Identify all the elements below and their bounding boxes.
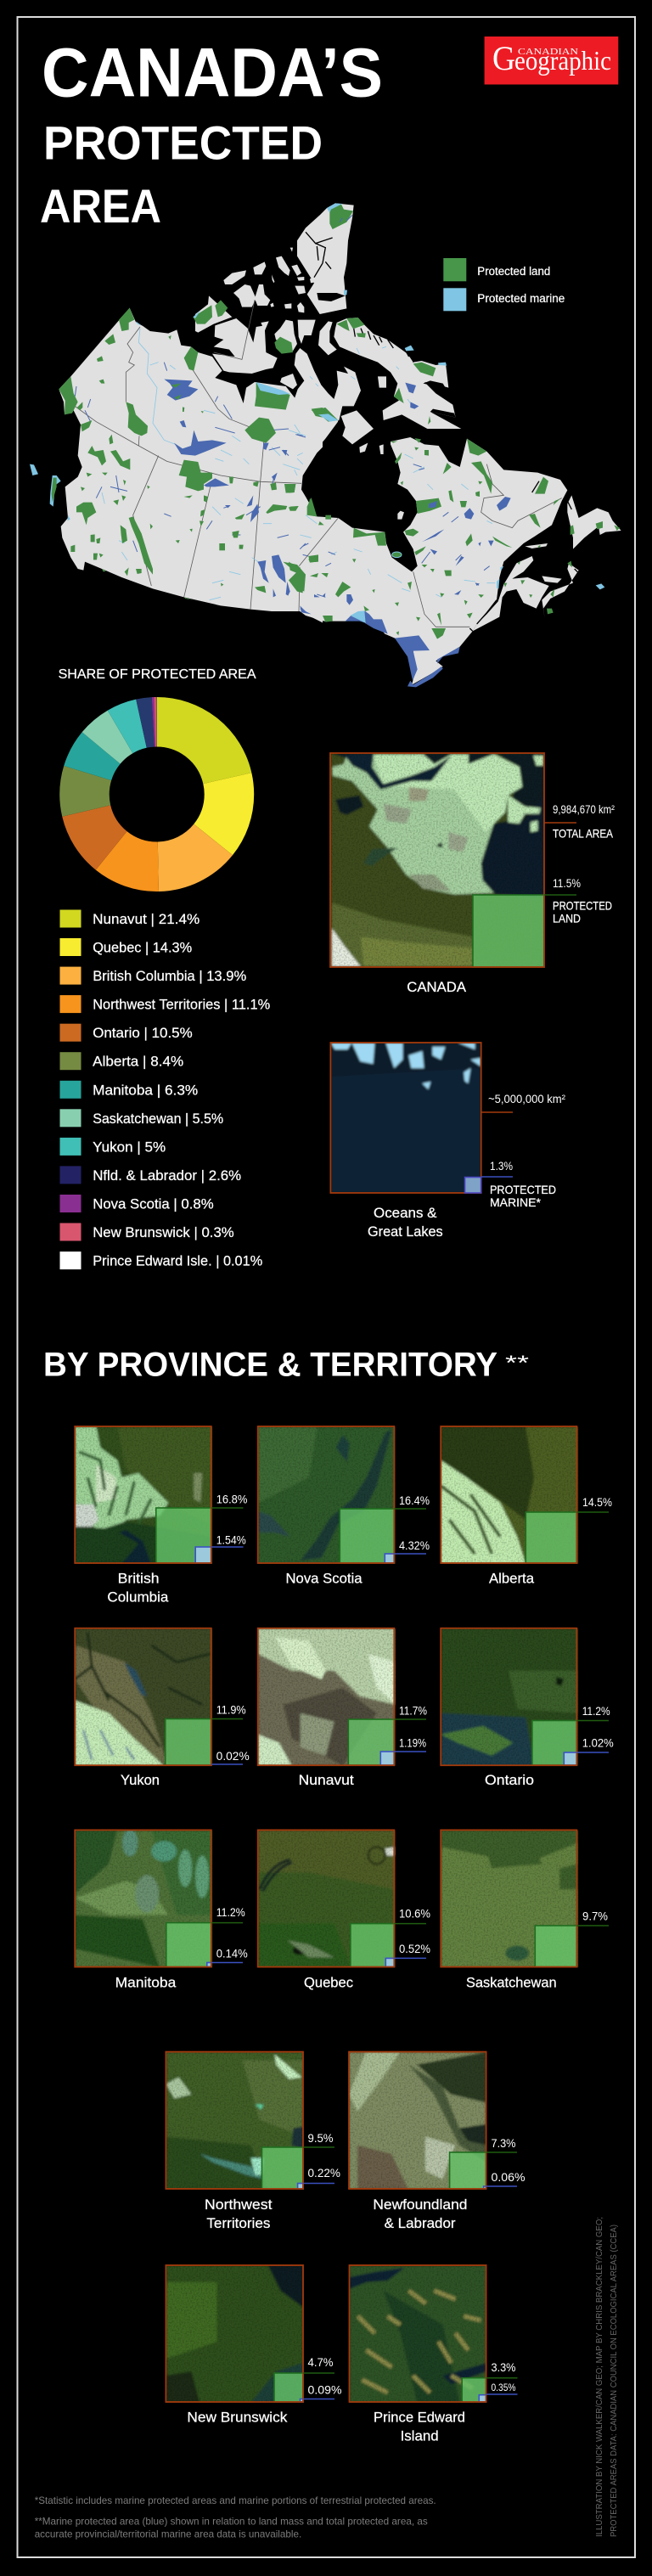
arctic islands xyxy=(195,248,361,484)
protected land areas, north xyxy=(274,203,447,464)
panel: Saskatchewan: 9.7% xyxy=(582,1910,608,1922)
heading: by province and territory: ** xyxy=(505,1352,529,1375)
panel: New Brunswick: 4.7% xyxy=(307,2356,333,2369)
panel: Ontario xyxy=(441,1628,614,1788)
caption: oceans and great lakes xyxy=(368,1205,443,1240)
label: total area: 9,984,670 km² xyxy=(553,803,615,816)
panel: Manitoba: 0.14% xyxy=(216,1947,248,1960)
panel: Ontario: Ontario xyxy=(485,1772,534,1788)
panel: Quebec: 0.52% xyxy=(399,1943,430,1955)
donut legend: Saskatchewan | 5.5% xyxy=(93,1111,223,1127)
label: protected marine: PROTECTED xyxy=(490,1183,556,1196)
panel: Newfoundland and Labrador: Newfoundland xyxy=(373,2196,467,2213)
label: protected land: LAND xyxy=(553,912,581,925)
panel: Newfoundland and Labrador: 7.3% xyxy=(491,2137,516,2150)
footnotes: **Marine protected area (blue) shown in relation to land mass and total protected area, as xyxy=(35,2515,428,2527)
panel: Northwest Territories: Territories xyxy=(206,2215,270,2231)
panel: Northwest Territories: 0.22% xyxy=(307,2167,340,2179)
panel: Nova Scotia: 16.4% xyxy=(399,1494,430,1507)
panel: British Columbia: Columbia xyxy=(107,1589,169,1605)
panel: British Columbia: 1.54% xyxy=(216,1534,246,1547)
panel: Manitoba xyxy=(75,1829,248,1991)
label: total area: TOTAL AREA xyxy=(553,827,614,841)
panel: New Brunswick xyxy=(166,2265,341,2425)
credits (rotated): PROTECTED AREAS DATA: CANADIAN COUNCIL ON ECOLOGICAL AREAS (CCEA) xyxy=(609,2224,619,2537)
donut legend: Yukon | 5% xyxy=(93,1139,166,1155)
donut legend: Nunavut | 21.4% xyxy=(93,911,200,927)
panel: Nunavut: 1.19% xyxy=(399,1737,426,1749)
map legend: Protected marine xyxy=(477,292,565,305)
title: CANADA’S xyxy=(42,34,383,112)
panel: New Brunswick: New Brunswick xyxy=(187,2410,288,2425)
label: protected marine xyxy=(481,1160,556,1209)
panel: Ontario: 11.2% xyxy=(582,1705,610,1718)
heading: share of protected area: SHARE OF PROTECTED AREA xyxy=(59,667,256,682)
panel: Newfoundland and Labrador: 0.06% xyxy=(491,2171,525,2184)
panel: Alberta: 14.5% xyxy=(582,1496,612,1509)
label: protected marine: 1.3% xyxy=(490,1160,513,1173)
panel: Northwest Territories xyxy=(166,2052,340,2231)
donut legend: Northwest Territories | 11.1% xyxy=(93,997,270,1013)
label: total area xyxy=(544,803,615,841)
panel: Quebec: 10.6% xyxy=(399,1907,430,1921)
caption: oceans and great lakes: Oceans & xyxy=(374,1205,437,1221)
protected land areas, south and east xyxy=(289,425,620,687)
donut legend: Nfld. & Labrador | 2.6% xyxy=(93,1167,241,1184)
panel: New Brunswick: 0.09% xyxy=(307,2383,341,2396)
donut legend: Nova Scotia | 0.8% xyxy=(93,1195,214,1212)
map legend: Protected land xyxy=(477,265,550,278)
panel: British Columbia: 16.8% xyxy=(216,1493,247,1506)
Hudson Bay and islands xyxy=(301,410,580,631)
donut chart xyxy=(84,722,229,867)
label: protected land: PROTECTED xyxy=(553,899,612,913)
panel: oceans and great lakes satellite xyxy=(330,1043,565,1240)
label: protected land xyxy=(544,877,612,925)
panel: Nunavut xyxy=(258,1628,427,1788)
panel: Prince Edward Island: Island xyxy=(401,2428,439,2444)
logo: Canadian Geographic xyxy=(485,37,618,85)
label: total marine: ~5,000,000 km² xyxy=(488,1093,565,1105)
panel: Northwest Territories: 9.5% xyxy=(307,2132,333,2145)
panel: Prince Edward Island: 0.35% xyxy=(491,2382,516,2393)
protected land areas, west xyxy=(30,300,323,614)
panel: Ontario: 1.02% xyxy=(582,1737,614,1749)
credits (rotated) xyxy=(594,2217,619,2537)
footnotes: *Statistic includes marine protected areas and marine portions of terrestrial protected areas. xyxy=(35,2494,436,2506)
donut legend: Ontario | 10.5% xyxy=(93,1025,193,1041)
panel: Yukon xyxy=(75,1628,250,1788)
panel: Saskatchewan: Saskatchewan xyxy=(466,1975,557,1991)
panel: Quebec xyxy=(258,1830,430,1991)
donut legend xyxy=(59,910,270,1269)
panel: Newfoundland and Labrador: & Labrador xyxy=(385,2215,456,2231)
label: protected land: 11.5% xyxy=(553,877,581,890)
panel: Nunavut: 11.7% xyxy=(399,1705,427,1718)
panel: Manitoba: Manitoba xyxy=(115,1975,177,1991)
panel: Yukon: Yukon xyxy=(121,1772,160,1788)
panel: Nova Scotia xyxy=(258,1426,430,1587)
label: protected marine: MARINE* xyxy=(490,1195,542,1209)
title: AREA xyxy=(40,179,161,233)
donut legend: Alberta | 8.4% xyxy=(93,1054,183,1070)
caption: oceans and great lakes: Great Lakes xyxy=(368,1223,443,1240)
panel: Prince Edward Island: 3.3% xyxy=(491,2361,516,2374)
panel: Nova Scotia: Nova Scotia xyxy=(285,1571,363,1587)
map of Canada xyxy=(30,203,621,687)
logo: Canadian Geographic: CANADIAN xyxy=(518,48,579,57)
panel: Prince Edward Island xyxy=(350,2265,518,2444)
title xyxy=(40,34,383,233)
arctic fjords and inlets xyxy=(306,232,456,418)
footnotes: accurate provincial/territorial marine area data is unavailable. xyxy=(35,2528,301,2539)
panel: British Columbia: British xyxy=(118,1571,160,1587)
donut legend: New Brunswick | 0.3% xyxy=(93,1224,234,1240)
panel: British Columbia xyxy=(75,1426,247,1605)
panel: Alberta: Alberta xyxy=(489,1571,535,1587)
footnotes xyxy=(35,2494,436,2539)
panel: Prince Edward Island: Prince Edward xyxy=(374,2410,465,2425)
credits (rotated): ILLUSTRATION BY NICK WALKER/CAN GEO; MAP BY CHRIS BRACKLEY/CAN GEO; xyxy=(594,2217,604,2537)
panel: share of protected area xyxy=(59,667,270,1269)
title: PROTECTED xyxy=(43,115,323,170)
panel: Saskatchewan xyxy=(441,1830,609,1991)
panel: Yukon: 0.02% xyxy=(216,1750,250,1763)
logo: Canadian Geographic: eographic xyxy=(514,45,611,76)
panel: Nova Scotia: 4.32% xyxy=(399,1539,430,1552)
label: total marine xyxy=(481,1093,565,1112)
donut legend: Prince Edward Isle. | 0.01% xyxy=(93,1253,262,1269)
donut legend: Manitoba | 6.3% xyxy=(93,1082,198,1098)
map legend xyxy=(443,258,565,311)
panel: Northwest Territories: Northwest xyxy=(205,2196,273,2213)
panel: Canada satellite xyxy=(330,753,615,995)
panel: Newfoundland and Labrador xyxy=(349,2052,525,2231)
panel: Alberta xyxy=(441,1426,612,1587)
donut legend: Quebec | 14.3% xyxy=(93,939,192,956)
heading: by province and territory: BY PROVINCE & TERRITORY xyxy=(43,1347,497,1384)
panel: Nunavut: Nunavut xyxy=(299,1772,354,1788)
panel: Quebec: Quebec xyxy=(304,1975,353,1991)
caption: Canada: CANADA xyxy=(407,979,467,995)
panel: Yukon: 11.9% xyxy=(216,1704,246,1717)
panel: Manitoba: 11.2% xyxy=(216,1906,245,1919)
donut legend: British Columbia | 13.9% xyxy=(93,968,246,984)
logo: Canadian Geographic: G xyxy=(492,39,515,77)
